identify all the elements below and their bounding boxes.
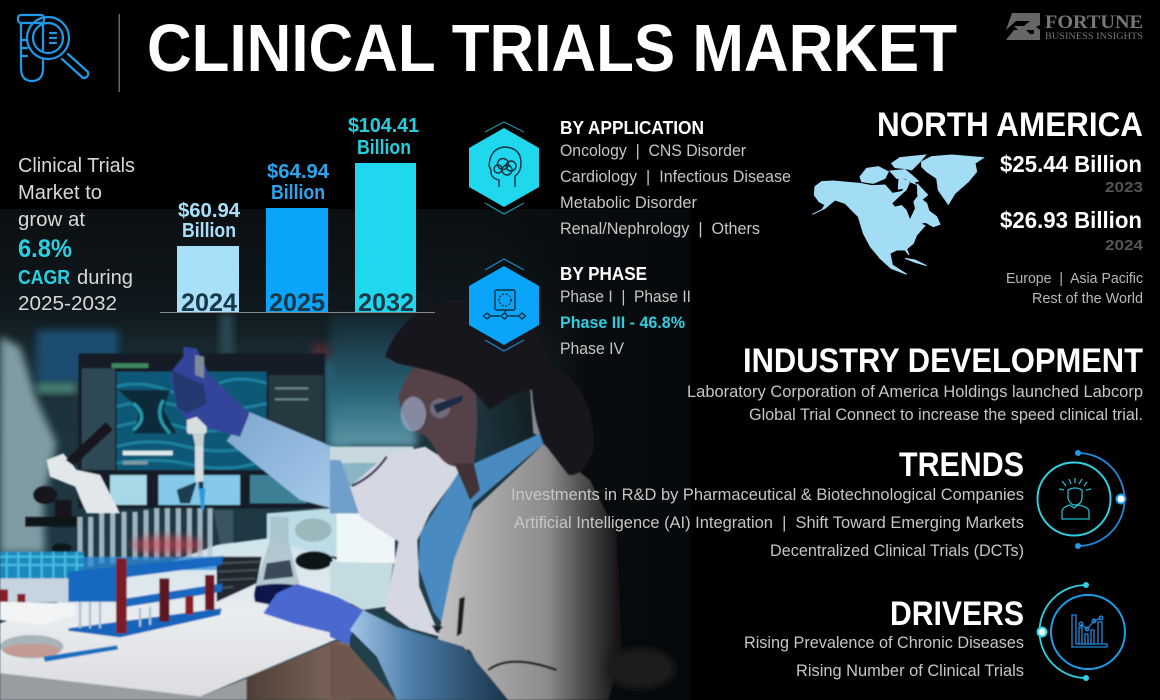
text block: other regions xyxy=(1006,271,1143,307)
text block: trends: Artificial Intelligence (AI) Integration | Shift Toward Emerging Markets xyxy=(514,513,1024,532)
CAGR statement: grow at xyxy=(18,209,85,231)
text block: by application: Oncology | CNS Disorder xyxy=(560,141,746,160)
bar 2032: 2032 xyxy=(358,289,414,317)
text block: industry development: Global Trial Connect to increase the speed clinical trial. xyxy=(749,405,1143,424)
header icon: test tube with magnifier xyxy=(18,15,88,81)
text block: by phase: Phase I | Phase II xyxy=(560,287,691,306)
CAGR statement: 2025-2032 xyxy=(18,293,117,315)
text block: by application xyxy=(560,118,791,238)
text block: by application: Cardiology | Infectious Disease xyxy=(560,167,791,186)
text block: by phase: BY PHASE xyxy=(560,264,647,284)
CAGR statement: Market to xyxy=(18,182,102,204)
icon: phase hexagon with process nodes xyxy=(469,259,539,351)
bar 2025: $64.94 xyxy=(267,161,330,183)
bar 2024: $60.94 xyxy=(178,200,241,222)
stats: North America values: 2024 xyxy=(1105,237,1144,254)
CAGR statement: CAGR xyxy=(18,267,70,289)
text block: drivers: Rising Number of Clinical Trials xyxy=(796,661,1024,680)
map: North America xyxy=(812,155,983,274)
text block: by phase xyxy=(560,264,691,358)
text block: industry development xyxy=(687,382,1143,424)
icon: drivers circle with bar chart xyxy=(1038,582,1125,681)
stats: North America values: 2023 xyxy=(1105,179,1143,196)
logo: Fortune Business Insights: BUSINESS INSIGHTS xyxy=(1045,32,1143,42)
text block: by phase: Phase IV xyxy=(560,339,625,358)
bar chart xyxy=(160,115,435,317)
text block: trends: Investments in R&D by Pharmaceutical & Biotechnological Companies xyxy=(511,485,1024,504)
bar 2025: Billion xyxy=(271,182,325,204)
photo: scientist pipetting in a laboratory xyxy=(0,209,690,700)
text block: drivers xyxy=(744,633,1024,680)
text block: trends: Decentralized Clinical Trials (DCTs) xyxy=(770,541,1024,560)
header divider xyxy=(118,14,120,92)
bar 2025 xyxy=(266,161,330,317)
bar 2024: Billion xyxy=(182,220,236,242)
title: CLINICAL TRIALS MARKET xyxy=(147,11,957,86)
text block: other regions: Rest of the World xyxy=(1032,291,1143,307)
icon: application hexagon with head xyxy=(469,122,539,214)
CAGR statement: 6.8% xyxy=(18,235,72,263)
bar 2024 xyxy=(177,200,241,317)
logo: Fortune Business Insights: FORTUNE xyxy=(1045,12,1143,33)
heading: Trends: TRENDS xyxy=(899,446,1024,484)
text block: by application: Metabolic Disorder xyxy=(560,193,697,212)
bar 2032 xyxy=(348,115,419,317)
stats: North America values: $25.44 Billion xyxy=(1000,151,1142,177)
text block: trends xyxy=(511,485,1024,560)
text block: drivers: Rising Prevalence of Chronic Diseases xyxy=(744,633,1024,652)
heading: Drivers: DRIVERS xyxy=(890,595,1024,633)
CAGR statement xyxy=(18,155,135,315)
bar 2025: 2025 xyxy=(269,289,325,317)
bar 2032: $104.41 xyxy=(348,115,419,137)
photo: bench equipment xyxy=(0,313,350,700)
text block: other regions: Europe | Asia Pacific xyxy=(1006,271,1143,287)
icon: trends circle with thinking person xyxy=(1038,450,1126,549)
bar 2024: 2024 xyxy=(181,289,237,317)
photo: scientist xyxy=(330,300,675,700)
heading: North America: NORTH AMERICA xyxy=(877,106,1143,144)
text block: by application: Renal/Nephrology | Others xyxy=(560,219,760,238)
logo: Fortune Business Insights xyxy=(1006,12,1143,42)
CAGR statement: during xyxy=(77,267,133,289)
text block: by phase: Phase III - 46.8% xyxy=(560,313,685,332)
text block: industry development: Laboratory Corporation of America Holdings launched Labcorp xyxy=(687,382,1143,401)
CAGR statement: Clinical Trials xyxy=(18,155,135,177)
stats: North America values xyxy=(1000,151,1144,254)
bar 2032: Billion xyxy=(357,137,411,159)
stats: North America values: $26.93 Billion xyxy=(1000,207,1142,233)
text block: by application: BY APPLICATION xyxy=(560,118,704,138)
